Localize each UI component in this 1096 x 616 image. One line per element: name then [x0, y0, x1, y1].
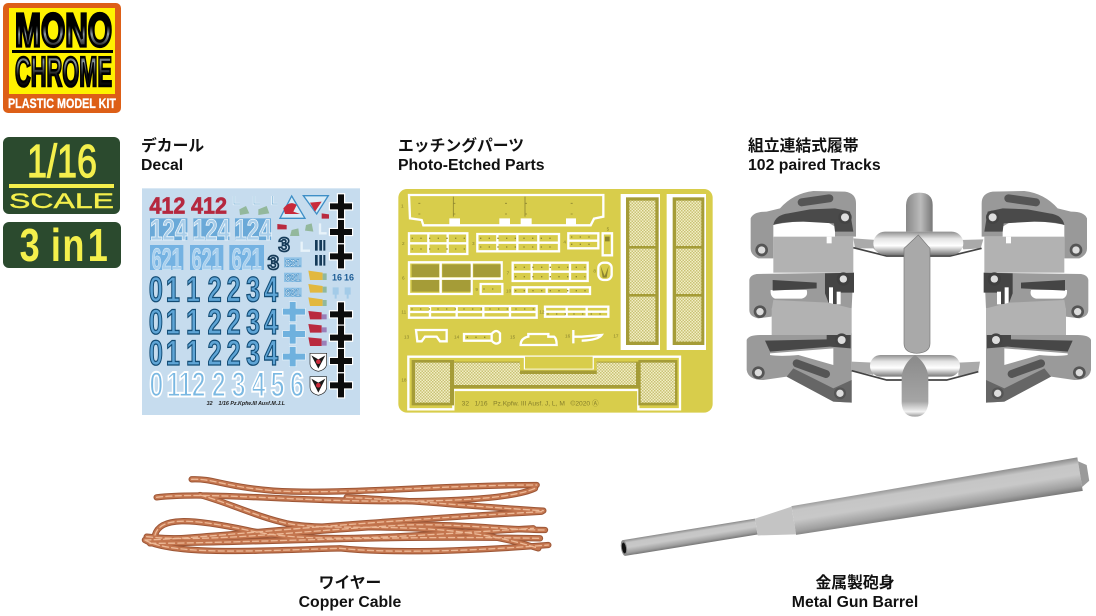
heading: decal: デカール [141, 136, 204, 155]
caption: metal gun barrel [792, 573, 918, 611]
emblem triangles [280, 196, 328, 218]
part numbers: 18 [401, 378, 407, 383]
part numbers: 5 [607, 227, 610, 232]
16 16 markings: 16 [344, 273, 354, 283]
right track links [982, 191, 1091, 403]
caption: copper cable: Copper Cable [299, 594, 402, 611]
part numbers: 2 [402, 241, 405, 246]
part numbers: 13 [404, 334, 410, 339]
fret caption: 32 1/16 Pz.Kpfw. III Ausf. J, L, M ©2020 Ⓐ [462, 400, 599, 408]
metal gun barrel [618, 456, 1091, 565]
badge: 3 in 1: 3in1 [20, 219, 108, 271]
red pennants [277, 213, 329, 346]
621 markings: 621 [192, 242, 222, 276]
631 markings: 631 [285, 258, 301, 269]
center sprue [852, 193, 983, 417]
part numbers: 6 [402, 275, 405, 280]
dark 3 markings: 3 [278, 234, 290, 257]
badge: 1/16 scale: SCALE [9, 190, 114, 213]
left track links [747, 191, 856, 403]
heading: paired tracks: 102 paired Tracks [748, 157, 881, 174]
part numbers: 4 [563, 239, 566, 244]
white digit row: 011223456 [149, 366, 304, 405]
16 16 markings [332, 273, 354, 283]
blue digit rows: 0112234 [149, 271, 278, 310]
part numbers: 14 [454, 334, 460, 339]
part numbers: 17 [613, 334, 619, 339]
yellow pennants [308, 271, 327, 306]
small pale marks and green shapes [234, 196, 327, 251]
part numbers: 10 [506, 288, 512, 293]
124 markings [150, 214, 272, 247]
part numbers: 8 [593, 268, 596, 273]
blue crosses [283, 302, 305, 367]
sheet caption: 32 1/16 Pz.Kpfw.III Ausf.M.J.L [207, 401, 285, 407]
124 markings: 124 [234, 214, 272, 247]
631 markings: 631 [285, 288, 301, 299]
part numbers: 3 [472, 241, 475, 246]
621 markings: 621 [152, 242, 182, 276]
dark 3 markings: 3 [268, 251, 279, 274]
heading: photo-etched parts: エッチングパーツ [398, 136, 524, 155]
heading: photo-etched parts: Photo-Etched Parts [398, 157, 545, 174]
panel: decal sheet [142, 188, 360, 415]
part numbers: 15 [510, 334, 516, 339]
part numbers: 1 [401, 204, 404, 209]
caption: copper cable: ワイヤー [319, 575, 381, 592]
part numbers: 7 [507, 270, 510, 275]
logo: Mono Chrome plastic model kit: PLASTIC MODEL KIT [8, 96, 117, 111]
black crosses [330, 194, 352, 397]
dark 3 markings [268, 234, 290, 274]
part 17: mesh screens [621, 194, 706, 350]
caption: metal gun barrel: Metal Gun Barrel [792, 594, 918, 611]
124 markings: 124 [150, 214, 188, 247]
part ticks [411, 237, 610, 337]
caption: copper cable [299, 575, 402, 611]
621 markings: 621 [232, 242, 262, 276]
caption: metal gun barrel: 金属製砲身 [816, 573, 895, 592]
621 markings [150, 242, 264, 276]
631 markings [284, 257, 302, 299]
red 412 markings [149, 192, 227, 218]
logo: Mono Chrome plastic model kit [3, 3, 121, 113]
heading: decal: Decal [141, 157, 183, 174]
part numbers: 9 [475, 287, 478, 292]
logo: Mono Chrome plastic model kit: MONO [15, 4, 112, 56]
631 markings: 631 [285, 273, 301, 284]
panel: paired track parts [747, 191, 1091, 417]
heading: photo-etched parts [398, 136, 545, 174]
16 16 markings: 16 [332, 273, 342, 283]
part numbers: 12 [539, 309, 545, 314]
part numbers [401, 204, 619, 383]
logo: Mono Chrome plastic model kit: CHROME [15, 48, 112, 95]
triple bars [315, 240, 325, 266]
panel: photo-etched fret [398, 189, 713, 413]
124 markings: 124 [193, 214, 231, 247]
copper cable [145, 479, 548, 551]
part numbers: 16 [565, 334, 571, 339]
small part frames [409, 233, 612, 345]
heading: decal [141, 136, 204, 174]
badge: 1/16 scale [3, 135, 120, 214]
part 18: large mesh frame [408, 357, 680, 409]
red 412 markings: 412 [191, 192, 227, 218]
part 1: long plate [409, 195, 603, 225]
badge: 1/16 scale: 1/16 [27, 135, 97, 187]
red 412 markings: 412 [149, 192, 185, 218]
heraldic shields [310, 353, 327, 395]
heading: paired tracks [748, 136, 881, 174]
pale figures [333, 287, 351, 299]
part numbers: 11 [401, 309, 407, 314]
blue digit rows [149, 271, 278, 373]
part 6: solid plates [409, 262, 502, 294]
blue digit rows: 0112234 [149, 334, 278, 373]
heading: paired tracks: 組立連結式履帯 [748, 136, 859, 155]
blue digit rows: 0112234 [149, 303, 278, 342]
